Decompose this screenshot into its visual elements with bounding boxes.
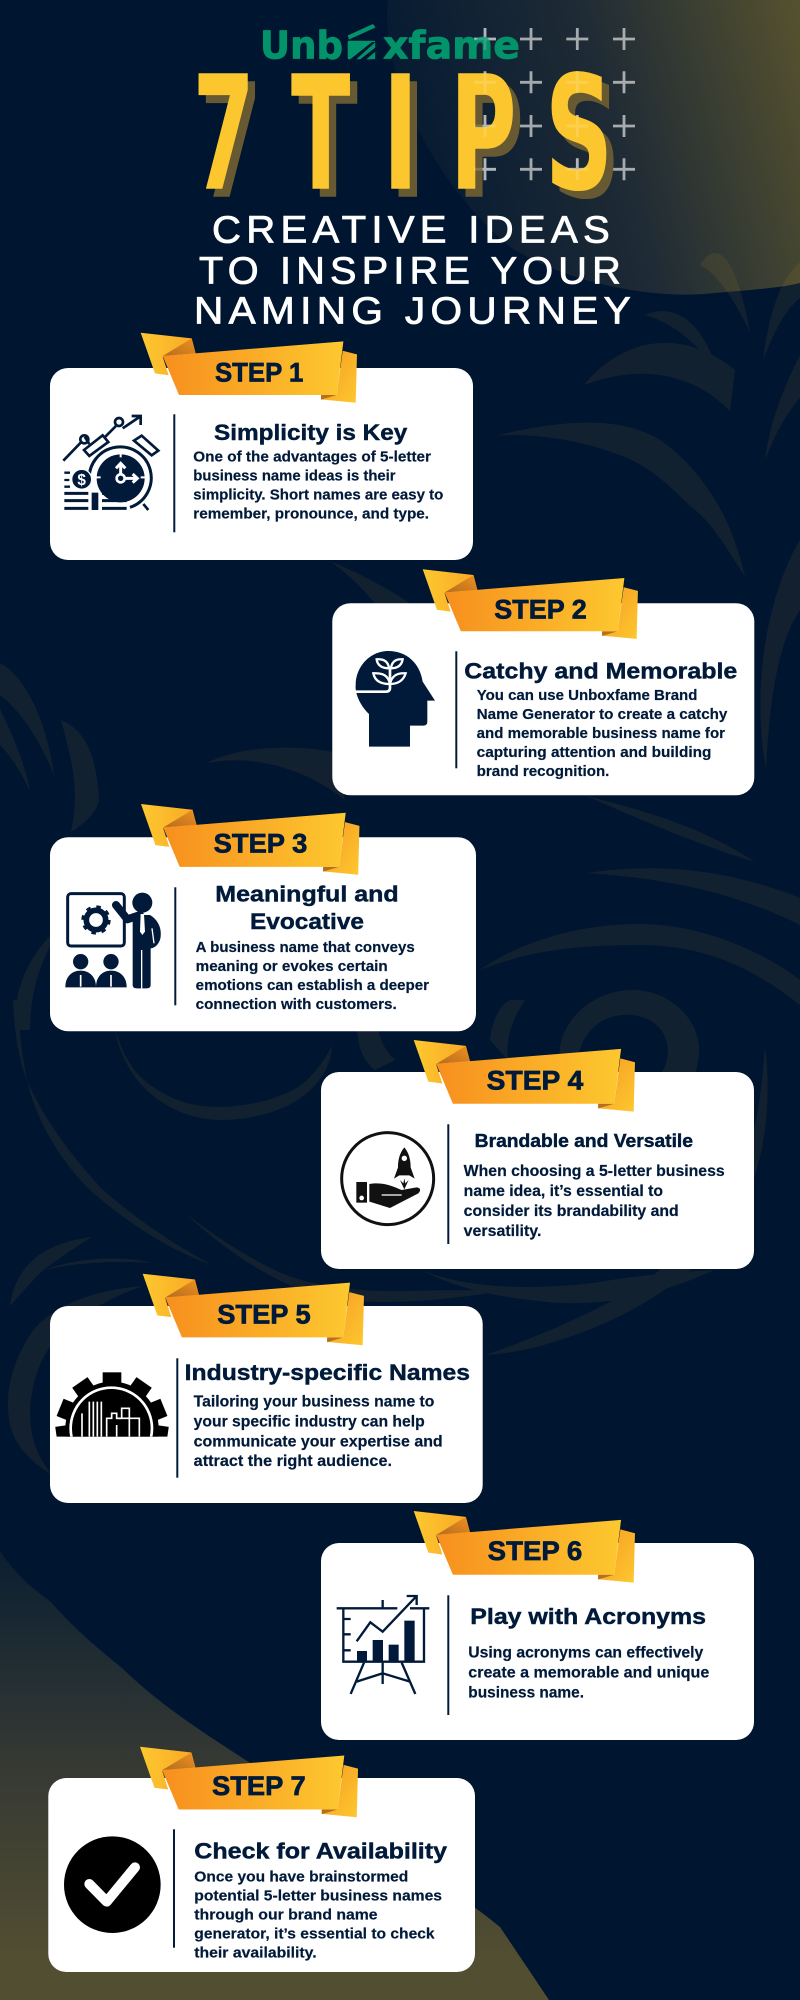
card 2: [332, 603, 754, 795]
title letters: S: [545, 42, 613, 226]
card 5: [50, 1306, 483, 1503]
background blob: top right olive glow: [387, 0, 800, 295]
title letters: 7: [193, 44, 255, 227]
body text: business name.: [468, 1684, 584, 1701]
icon: check mark circle: [64, 1836, 161, 1933]
background blob: bottom left olive glow: [0, 1551, 549, 2000]
heading: Brandable and Versatile: Brandable and Versatile: [475, 1131, 693, 1151]
icon: clock with money and growth: $: [77, 472, 86, 489]
divider: [455, 651, 457, 768]
ribbon: step 6: [414, 1511, 635, 1583]
icon: open box in logo: [348, 24, 376, 60]
panel: step 7: [48, 1747, 475, 1972]
body text: business name ideas is their: [193, 468, 396, 485]
subtitle: TO INSPIRE YOUR: [199, 250, 626, 292]
body text: [196, 939, 429, 1013]
title letters: [193, 42, 613, 227]
step label 7: STEP 7: [212, 1771, 306, 1801]
title shadow: I: [390, 51, 426, 235]
body text: consider its brandability and: [464, 1203, 679, 1220]
body text: generator, it’s essential to check: [194, 1925, 435, 1942]
decorative plus grid overlay: [474, 28, 588, 180]
body text: your specific industry can help: [194, 1413, 425, 1430]
icon: head with plant: [356, 651, 435, 747]
heading: Industry-specific Names: Industry-specific Names: [185, 1360, 470, 1385]
ribbon: step 1: [141, 333, 357, 403]
body text: communicate your expertise and: [194, 1433, 443, 1450]
panel: step 5: [50, 1274, 483, 1503]
body text: connection with customers.: [196, 996, 397, 1013]
divider: [447, 1595, 449, 1715]
step label 5: STEP 5: [217, 1299, 311, 1329]
icon: presenter with board and audience: [65, 893, 161, 988]
panel: step 1: [50, 333, 473, 560]
subtitle: [194, 209, 636, 332]
panel: step 3: [50, 804, 476, 1031]
divider: [447, 1124, 449, 1244]
body text: [194, 1393, 443, 1470]
body text: [464, 1163, 725, 1240]
body text: Once you have brainstormed: [194, 1868, 408, 1885]
title shadow: 7: [200, 52, 262, 235]
icon: presentation easel with rising chart: [337, 1596, 429, 1694]
step label 4: STEP 4: [487, 1065, 583, 1095]
body text: Name Generator to create a catchy: [477, 706, 728, 723]
divider: [174, 887, 176, 1005]
body text: When choosing a 5-letter business: [464, 1163, 725, 1180]
logo: Unboxfame: Unb: [260, 24, 343, 68]
step label 2: STEP 2: [494, 594, 587, 624]
title shadow: T: [298, 51, 358, 235]
divider: [176, 1358, 178, 1478]
step label 1: STEP 1: [215, 357, 303, 387]
body text: potential 5-letter business names: [194, 1887, 442, 1904]
divider: [173, 1829, 175, 1948]
body text: name idea, it’s essential to: [464, 1183, 663, 1200]
body text: their availability.: [194, 1944, 317, 1961]
icon: gear with factory: [55, 1372, 169, 1437]
panel: step 4: [321, 1040, 754, 1269]
body text: remember, pronounce, and type.: [193, 505, 429, 522]
body text: simplicity. Short names are easy to: [193, 487, 443, 504]
card 1: [50, 368, 473, 560]
title: 7 TIPS: [193, 42, 621, 235]
body text: through our brand name: [194, 1906, 378, 1923]
ribbon: step 7: [140, 1747, 358, 1817]
body text: One of the advantages of 5-letter: [193, 448, 431, 465]
panel: step 2: [332, 569, 754, 795]
decorative plus grid: [474, 28, 635, 180]
body text: capturing attention and building: [477, 744, 711, 761]
body text: [194, 1868, 442, 1961]
title shadow: S: [552, 50, 621, 234]
body text: versatility.: [464, 1223, 541, 1240]
card 4: [321, 1072, 754, 1269]
title shadow: P: [457, 51, 524, 235]
card 6: [321, 1543, 754, 1740]
ribbon: step 5: [143, 1274, 364, 1345]
body text: [477, 687, 728, 780]
body text: Tailoring your business name to: [194, 1393, 434, 1410]
body text: A business name that conveys: [196, 939, 415, 956]
icon: hand with rocket: [342, 1133, 434, 1225]
body text: attract the right audience.: [194, 1453, 392, 1470]
heading: Simplicity is Key: Simplicity is Key: [214, 420, 408, 445]
subtitle: CREATIVE IDEAS: [212, 209, 615, 251]
body text: Using acronyms can effectively: [468, 1644, 704, 1661]
step label 3: STEP 3: [214, 829, 307, 859]
body text: [468, 1644, 710, 1701]
icon: clock with money and growth: [63, 416, 158, 510]
heading: Play with Acronyms: Play with Acronyms: [470, 1604, 706, 1629]
heading: Meaningful and Evocative: Meaningful and: [215, 882, 399, 907]
panel: step 6: [321, 1511, 754, 1740]
logo: Unboxfame: xfame: [383, 24, 520, 68]
ribbon: step 2: [423, 569, 638, 639]
divider: [173, 414, 175, 532]
ribbon: step 3: [141, 804, 359, 875]
body text: [193, 448, 443, 522]
body text: create a memorable and unique: [468, 1664, 710, 1681]
step label 6: STEP 6: [488, 1536, 582, 1566]
heading: Catchy and Memorable: Catchy and Memorable: [464, 658, 737, 683]
subtitle: NAMING JOURNEY: [194, 290, 636, 332]
body text: emotions can establish a deeper: [196, 977, 429, 994]
logo: Unboxfame: [260, 24, 520, 68]
heading: Check for Availability: Check for Availability: [194, 1838, 448, 1863]
title letters: P: [450, 43, 517, 227]
body text: brand recognition.: [477, 763, 609, 780]
card 7: [48, 1778, 475, 1972]
ribbon: step 4: [414, 1040, 635, 1112]
title letters: I: [382, 43, 419, 227]
body text: meaning or evokes certain: [196, 958, 388, 975]
card 3: [50, 837, 476, 1031]
body text: You can use Unboxfame Brand: [477, 687, 697, 704]
title shadow: [200, 50, 621, 235]
body text: and memorable business name for: [477, 725, 725, 742]
heading: Meaningful and Evocative: Evocative: [250, 909, 364, 934]
background flourishes: [0, 253, 800, 1474]
title letters: T: [291, 43, 350, 227]
heading: Meaningful and Evocative: [215, 882, 399, 934]
